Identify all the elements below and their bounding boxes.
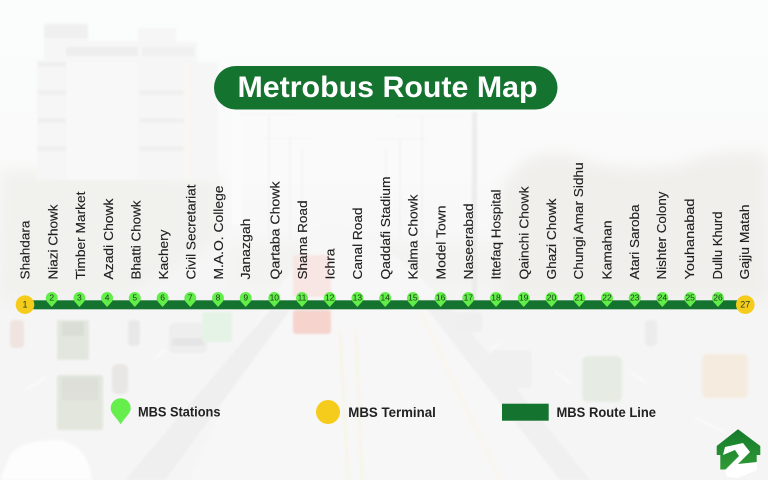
station name labels: Bhatti Chowk xyxy=(128,200,144,280)
station numbers: 27 xyxy=(740,300,750,310)
station name labels: Ghazi Chowk xyxy=(544,198,559,280)
station name labels: Azadi Chowk xyxy=(101,198,116,280)
station name labels: Civil Secretariat xyxy=(183,184,198,280)
station name labels: Kachery xyxy=(156,229,171,280)
station name labels: Gajju Matah xyxy=(737,204,752,280)
station name labels: Nishter Colony xyxy=(654,191,669,280)
station name labels: Naseerabad xyxy=(461,204,476,280)
station name labels: Shahdara xyxy=(18,220,33,280)
station name labels: Chungi Amar Sidhu xyxy=(571,162,586,280)
station numbers xyxy=(22,292,750,310)
station name labels: Kamahan xyxy=(600,220,614,280)
station name labels xyxy=(18,162,752,280)
station numbers: 16 xyxy=(436,292,446,302)
station name labels: Model Town xyxy=(434,206,448,280)
station name labels: Atari Saroba xyxy=(627,204,642,280)
title text: Metrobus Route Map xyxy=(238,71,538,104)
title pill xyxy=(214,66,558,110)
station name labels: Ittefaq Hospital xyxy=(488,189,504,280)
station numbers: 24 xyxy=(658,292,667,302)
station name labels: Dullu Khurd xyxy=(710,212,725,280)
station numbers: 14 xyxy=(380,292,390,302)
station numbers: 15 xyxy=(408,292,418,302)
route line xyxy=(25,300,745,309)
station name labels: Youhanabad xyxy=(682,198,697,280)
station numbers: 3 xyxy=(77,292,82,302)
legend: MBS Terminal: MBS Terminal xyxy=(348,405,436,420)
station numbers: 20 xyxy=(547,292,556,302)
icon: house logo xyxy=(717,429,760,478)
station numbers: 19 xyxy=(519,292,529,302)
legend: MBS Route Line xyxy=(502,404,656,421)
station name labels: Qainchi Chowk xyxy=(516,186,532,280)
station name labels: Kalma Chowk xyxy=(406,194,420,280)
station numbers: 22 xyxy=(602,292,612,302)
station numbers: 8 xyxy=(216,292,221,302)
station name labels: Qaddafi Stadium xyxy=(378,176,393,280)
building xyxy=(37,23,218,180)
lamp posts xyxy=(269,115,422,240)
station numbers: 9 xyxy=(243,292,248,302)
station numbers: 1 xyxy=(22,300,28,310)
legend: MBS Stations xyxy=(111,398,220,424)
station numbers: 10 xyxy=(270,292,279,302)
station numbers: 21 xyxy=(574,292,584,302)
station name labels: Canal Road xyxy=(350,207,365,280)
station name labels: M.A.O. College xyxy=(211,186,226,280)
station numbers: 23 xyxy=(630,292,640,302)
station numbers: 13 xyxy=(353,292,362,302)
station numbers: 18 xyxy=(491,292,501,302)
station numbers: 4 xyxy=(105,292,110,302)
station name labels: Janazgah xyxy=(238,218,253,280)
station numbers: 12 xyxy=(325,292,335,302)
station name labels: Timber Market xyxy=(73,191,88,280)
station numbers: 5 xyxy=(132,292,137,302)
station numbers: 17 xyxy=(464,292,473,302)
station name labels: Ichra xyxy=(322,248,338,280)
vehicles xyxy=(293,255,331,297)
station numbers: 11 xyxy=(298,292,307,302)
station numbers: 26 xyxy=(713,292,723,302)
station name labels: Shama Road xyxy=(295,200,310,280)
legend: MBS Terminal xyxy=(316,400,436,424)
station name labels: Qartaba Chowk xyxy=(267,181,282,280)
median barriers xyxy=(125,310,290,480)
station numbers: 6 xyxy=(160,292,165,302)
station pins xyxy=(46,292,724,307)
legend: MBS Stations: MBS Stations xyxy=(138,404,220,420)
station numbers: 25 xyxy=(685,292,695,302)
legend: MBS Route Line: MBS Route Line xyxy=(556,405,656,420)
station name labels: Niazi Chowk xyxy=(45,204,60,280)
terminal markers xyxy=(16,295,755,314)
station numbers: 7 xyxy=(188,292,193,302)
road surface xyxy=(0,310,768,480)
station numbers: 2 xyxy=(49,292,54,302)
